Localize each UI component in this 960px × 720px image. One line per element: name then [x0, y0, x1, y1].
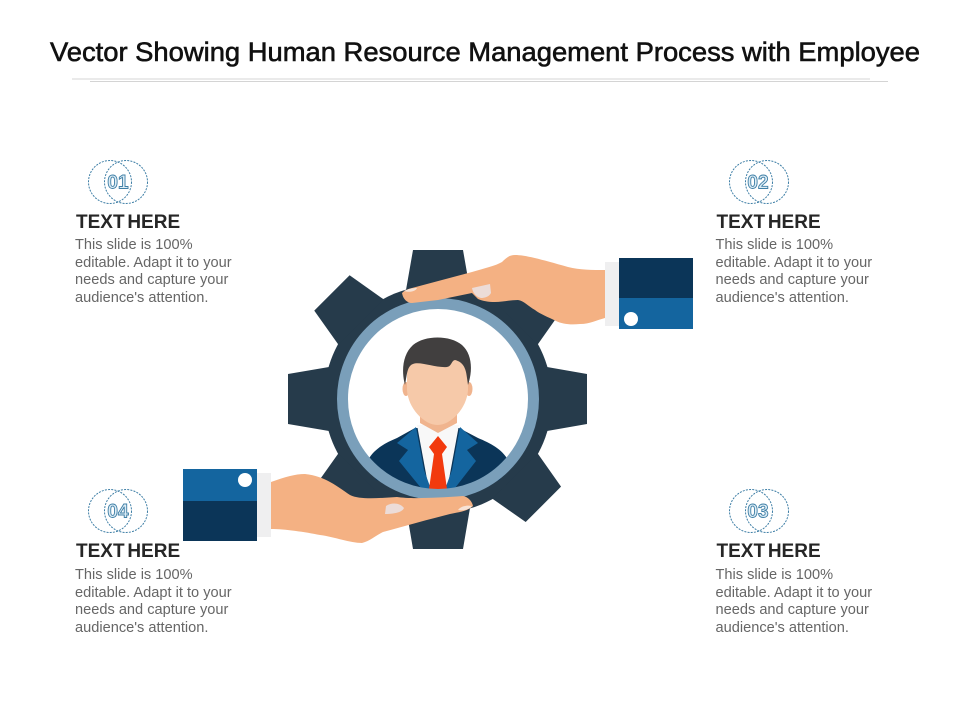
tie — [429, 436, 447, 489]
button — [238, 473, 252, 487]
body text 03: editable. Adapt it to your — [716, 585, 872, 601]
button — [624, 312, 638, 326]
icon: gear — [288, 250, 587, 549]
body text 04: editable. Adapt it to your — [75, 585, 232, 601]
panel: step 02 — [716, 160, 872, 306]
panel: step 01 — [75, 160, 232, 306]
body text 01: needs and capture your — [75, 272, 228, 288]
sleeve dark — [619, 258, 693, 298]
body text 03: This slide is 100% — [716, 567, 833, 583]
icon: top right hand — [402, 255, 693, 329]
body text 01: This slide is 100% — [75, 237, 193, 253]
icon: number 04 circles — [88, 490, 148, 532]
body text 03: needs and capture your — [716, 602, 869, 618]
icon: number 02 circles: 02 — [747, 172, 769, 194]
finger nail — [404, 288, 417, 292]
cuff — [605, 262, 619, 326]
icon: number 03 circles — [730, 490, 788, 532]
icon: bottom left hand — [183, 469, 473, 543]
central gear illustration — [183, 250, 693, 549]
body text 01: audience's attention. — [75, 290, 208, 306]
thumb nail — [472, 284, 491, 298]
body text 02: audience's attention. — [716, 290, 849, 306]
sleeve dark — [183, 501, 257, 541]
face — [407, 360, 468, 425]
hand — [271, 474, 473, 543]
heading 03: TEXT HERE — [716, 541, 821, 562]
body text 03: audience's attention. — [716, 620, 849, 636]
heading 01: TEXT HERE — [76, 212, 180, 233]
icon: number 01 circles — [88, 160, 148, 204]
cuff — [257, 473, 271, 537]
icon: number 03 circles: 03 — [747, 502, 769, 522]
suit jacket — [368, 428, 508, 496]
heading 04: TEXT HERE — [76, 541, 180, 562]
heading 02: TEXT HERE — [716, 212, 821, 233]
body text 04: This slide is 100% — [75, 567, 193, 583]
magnifier ring — [342, 304, 534, 494]
sleeve blue — [183, 469, 257, 501]
panel: step 04 — [75, 490, 232, 636]
icon: number 02 circles — [730, 160, 788, 204]
sleeve blue — [619, 298, 693, 329]
neck — [420, 410, 457, 433]
white circle inside ring — [346, 307, 530, 491]
icon: number 04 circles: 04 — [107, 502, 129, 522]
panel: step 03 — [716, 490, 872, 636]
lapels — [397, 427, 478, 492]
body text 02: needs and capture your — [716, 272, 869, 288]
title: Vector Showing Human Resource Management Process with Employee — [50, 37, 920, 67]
body text 01: editable. Adapt it to your — [75, 255, 232, 271]
finger nail — [458, 506, 472, 510]
body text 02: This slide is 100% — [716, 237, 833, 253]
ears — [402, 382, 410, 396]
body text 02: editable. Adapt it to your — [716, 255, 872, 271]
icon: employee portrait — [368, 338, 508, 496]
shirt — [417, 425, 459, 490]
icon: number 01 circles: 01 — [107, 172, 129, 194]
body text 04: needs and capture your — [75, 602, 228, 618]
thumb nail — [385, 504, 404, 514]
hand — [402, 255, 605, 324]
body text 04: audience's attention. — [75, 620, 208, 636]
hair — [403, 338, 471, 385]
